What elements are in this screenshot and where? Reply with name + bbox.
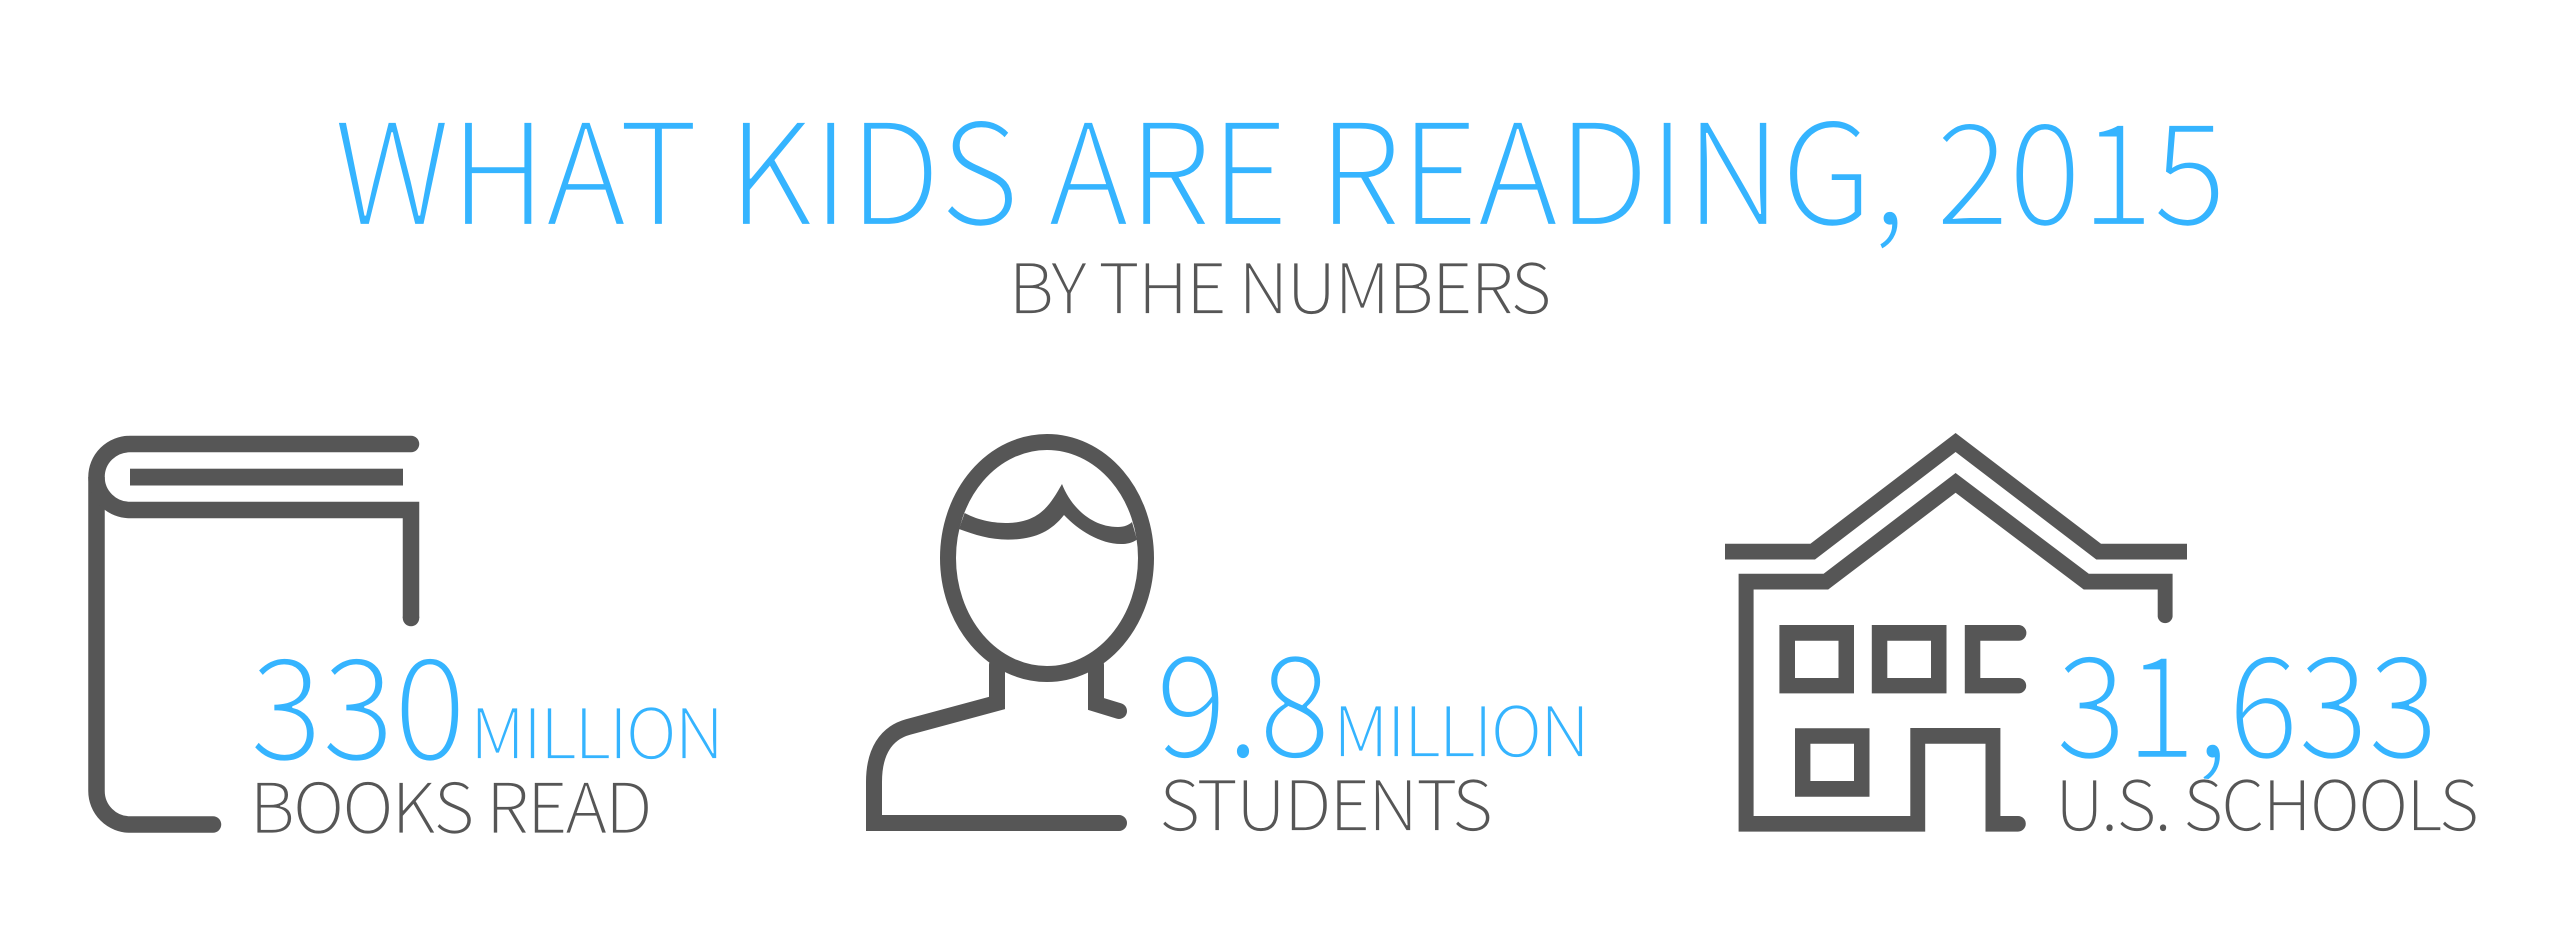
roof [1725,433,2187,560]
panel: students [874,442,1588,851]
icon: book [96,444,419,824]
stat: 9.8 million [1156,595,1588,798]
stat: 330 million [250,598,722,800]
window 3 [1965,625,2026,693]
building outline [1739,473,2173,832]
panel: books read [96,444,722,854]
stat: 9.8 million: MILLION [1333,676,1588,777]
window 1 [1779,625,1854,693]
label: students: STUDENTS [1159,750,1491,851]
stat: 9.8 million: 9.8 [1156,595,1330,798]
stat: 330 million: MILLION [470,678,722,779]
subtitle: BY THE NUMBERS [1008,233,1550,334]
window 4 [1795,728,1870,797]
icon: student [874,442,1146,823]
panel: schools [1725,433,2477,851]
stat: 31,633: 31,633 [2056,596,2438,798]
label: us schools: U.S. SCHOOLS [2055,750,2477,851]
stat: 330 million: 330 [250,598,466,800]
title: WHAT KIDS ARE READING, 2015 [334,63,2226,266]
label: books read: BOOKS READ [250,753,650,854]
icon: school [1725,433,2187,832]
window 2 [1872,625,1946,693]
